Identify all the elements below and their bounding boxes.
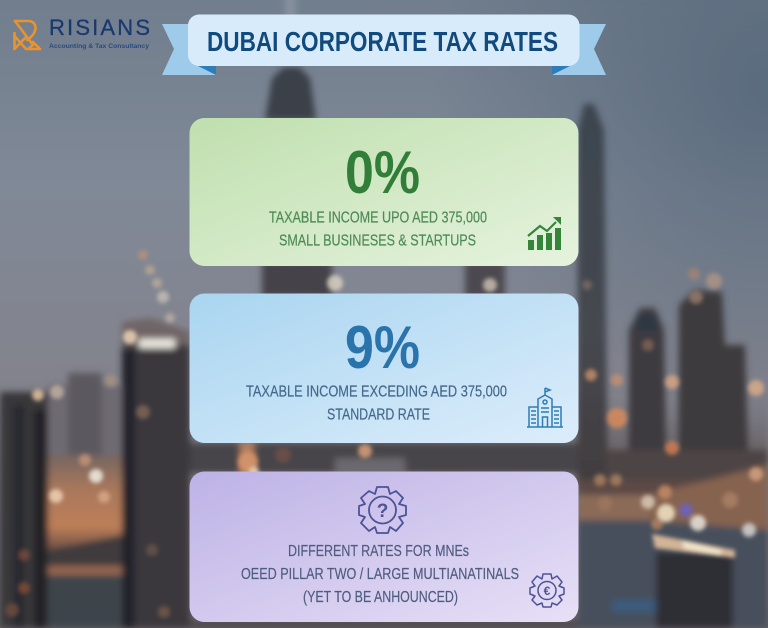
icon: euro gear — [530, 574, 564, 607]
panel: 0% rate — [190, 118, 578, 266]
ribbon: right tail — [552, 24, 606, 75]
text: 9% description — [246, 384, 507, 424]
icon: growth chart — [528, 217, 561, 250]
text: 0% description — [269, 210, 487, 250]
icon: question gear — [359, 487, 406, 533]
title plate — [188, 14, 580, 66]
logo name: RISIANS — [49, 15, 150, 40]
icon: question gear: ? — [377, 501, 388, 522]
text: MNE description: DIFFERENT RATES FOR MNEs — [288, 543, 469, 560]
ribbon: right fold — [552, 66, 570, 75]
panel: MNE rates — [190, 472, 578, 622]
text: MNE description: (YET TO BE ANHOUNCED) — [303, 589, 458, 606]
text: MNE description — [241, 543, 519, 606]
ribbon: left fold — [198, 66, 216, 75]
rate: 0%: 0% — [345, 139, 420, 206]
logo: Risians — [14, 15, 150, 50]
text: 0% description: TAXABLE INCOME UPO AED 375,000 — [269, 210, 487, 226]
icon: logo mark — [14, 21, 40, 49]
rate: 9%: 9% — [345, 314, 420, 381]
panel: 9% rate — [190, 294, 578, 443]
text: 0% description: SMALL BUSINESES & STARTUPS — [279, 232, 476, 250]
title: DUBAI CORPORATE TAX RATES — [207, 26, 558, 57]
logo tagline: Accounting & Tax Consultancy — [49, 43, 149, 50]
title banner — [162, 14, 606, 75]
ribbon: left tail — [162, 24, 216, 75]
text: MNE description: OEED PILLAR TWO / LARGE MULTIANATINALS — [241, 566, 519, 583]
icon: euro gear: € — [544, 584, 551, 598]
text: 9% description: TAXABLE INCOME EXCEDING AED 375,000 — [246, 384, 507, 400]
icon: office building — [527, 388, 563, 427]
text: 9% description: STANDARD RATE — [327, 406, 430, 424]
